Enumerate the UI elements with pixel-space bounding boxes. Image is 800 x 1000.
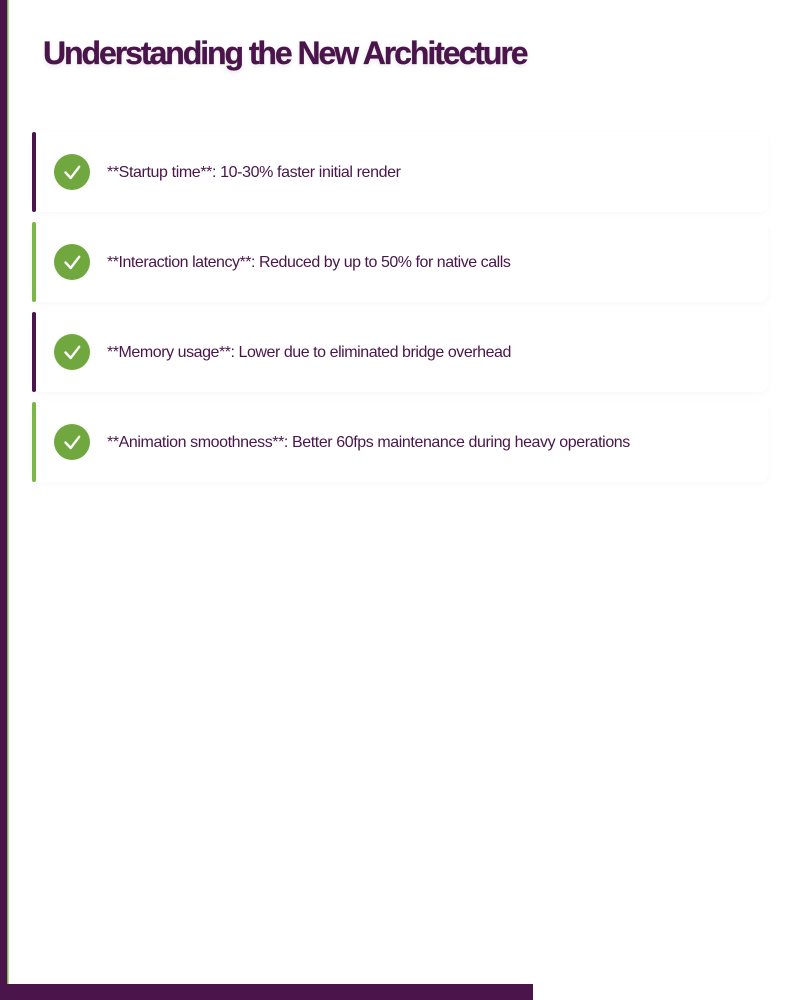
accent stripe [32,312,36,392]
icon: check [54,424,90,460]
title: Understanding the New Architecture [43,35,527,71]
icon: check [54,244,90,280]
panel: interaction latency [32,222,768,302]
icon: check [54,154,90,190]
accent stripe [32,132,36,212]
text: **Startup time**: 10-30% faster initial render [107,164,401,181]
left accent bar [0,0,9,1000]
accent stripe [32,222,36,302]
text: **Memory usage**: Lower due to eliminated bridge overhead [107,344,511,361]
bottom accent bar [0,984,533,1000]
icon: check [54,334,90,370]
accent stripe [32,402,36,482]
panel: memory usage [32,312,768,392]
text: **Interaction latency**: Reduced by up to 50% for native calls [107,254,510,271]
panel: startup time [32,132,768,212]
panel: animation smoothness [32,402,768,482]
text: **Animation smoothness**: Better 60fps maintenance during heavy operations [107,434,630,451]
